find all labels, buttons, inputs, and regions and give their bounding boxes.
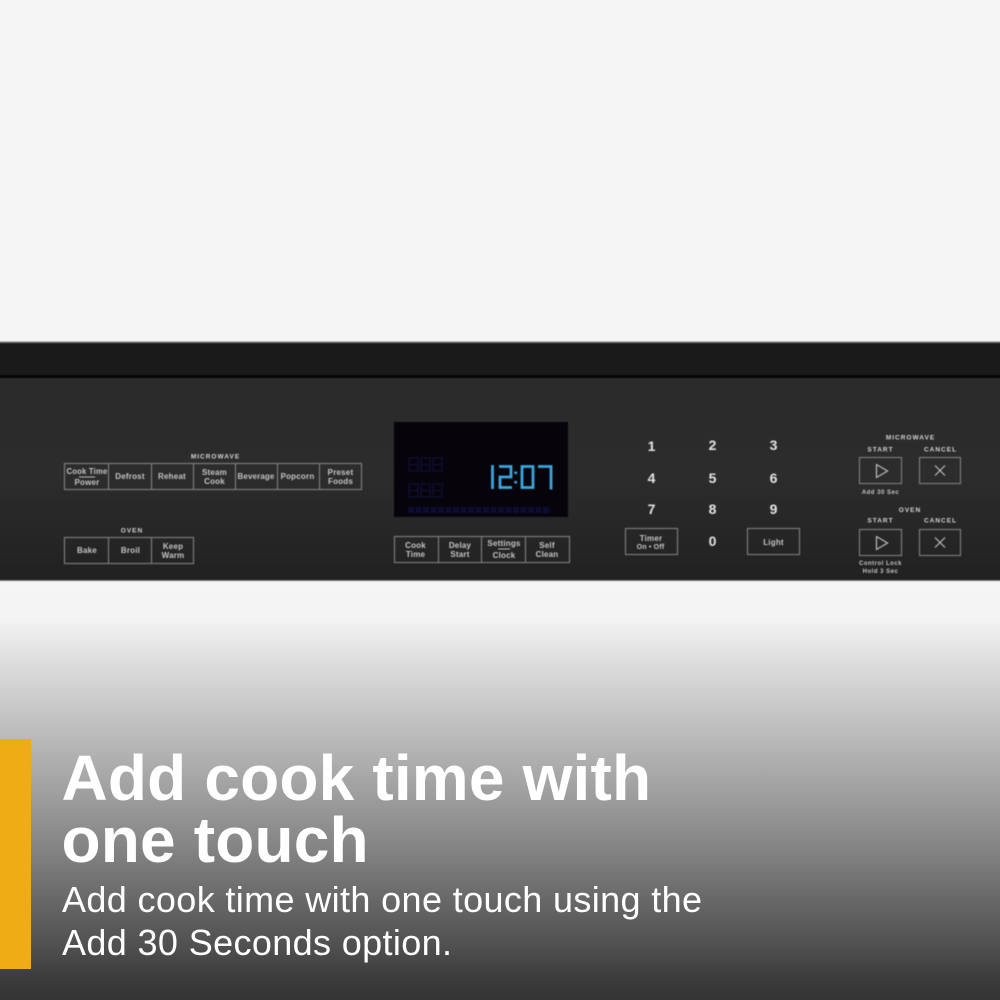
number keypad: 5 [709,470,717,486]
microwave start and cancel: CANCEL [924,446,957,454]
microwave button row: Preset [328,468,353,477]
oven start and cancel: START [867,518,894,524]
clock digits 12:07 [492,465,551,490]
oven button row: Warm [162,551,184,560]
microwave label: MICROWAVE [191,454,240,460]
oven heading: OVEN [899,507,921,514]
light button [748,528,800,554]
yellow accent bar [0,739,31,969]
dim display segments [408,458,551,510]
cancel button: x icon [920,458,960,484]
number keypad: 2 [709,437,717,453]
timer button [626,528,678,554]
microwave button row: Popcorn [281,472,314,481]
cancel button: x icon [920,530,960,556]
microwave heading: MICROWAVE [886,434,935,442]
title: one touch [62,804,369,876]
number keypad [648,437,778,549]
number keypad: 8 [709,501,717,517]
panel body [0,342,1000,581]
oven settings buttons: Settings [487,539,521,548]
microwave button row: Cook Time [66,467,108,476]
display: clock [394,422,568,517]
oven start and cancel: CANCEL [924,518,957,524]
number keypad: 1 [648,438,656,454]
start button: play icon [860,530,902,556]
oven label: OVEN [121,528,143,534]
oven start and cancel [859,507,960,575]
oven settings buttons [394,536,570,562]
title [62,742,651,876]
number keypad: 0 [709,533,717,549]
oven settings buttons: Clean [536,550,558,559]
oven button row: Keep [163,542,183,551]
timer button: Timer [640,534,662,543]
control lock label: Control Lock [859,561,902,567]
number keypad: 3 [770,437,778,453]
number keypad: 4 [648,470,656,486]
number keypad: 6 [770,470,778,486]
oven settings buttons: Cook [405,541,426,550]
oven settings buttons: Start [450,550,470,559]
oven button row: Broil [121,546,140,555]
title: Add cook time with [62,742,651,814]
oven function buttons [64,528,194,564]
microwave start and cancel: START [867,446,894,454]
start button: play icon [860,458,902,484]
timer button: On • Off [637,544,665,551]
microwave button row: Power [74,478,100,487]
oven button row [64,538,194,564]
microwave button row: Foods [328,477,353,486]
oven settings buttons: Delay [449,541,472,550]
microwave button row: Reheat [158,472,186,481]
subtitle [62,879,702,963]
microwave button row: Beverage [238,472,275,481]
light button: Light [763,538,784,547]
oven button row: Bake [77,546,97,555]
oven start and cancel: Hold 3 Sec [863,569,898,575]
add 30 sec label: Add 30 Sec [862,490,899,496]
microwave button row: Steam [202,468,227,477]
oven settings buttons: Clock [493,551,516,560]
background gradient [0,581,1000,1000]
microwave function buttons [64,454,362,490]
oven settings buttons: Self [539,541,555,550]
microwave button row: Cook [204,477,225,486]
microwave button row [64,464,362,490]
subtitle: Add cook time with one touch using the [62,879,702,920]
number keypad: 9 [770,501,778,517]
number keypad: 7 [648,501,656,517]
microwave button row: Defrost [115,472,145,481]
subtitle: Add 30 Seconds option. [62,922,452,963]
oven settings buttons: Time [406,550,426,559]
microwave start and cancel [860,434,960,496]
